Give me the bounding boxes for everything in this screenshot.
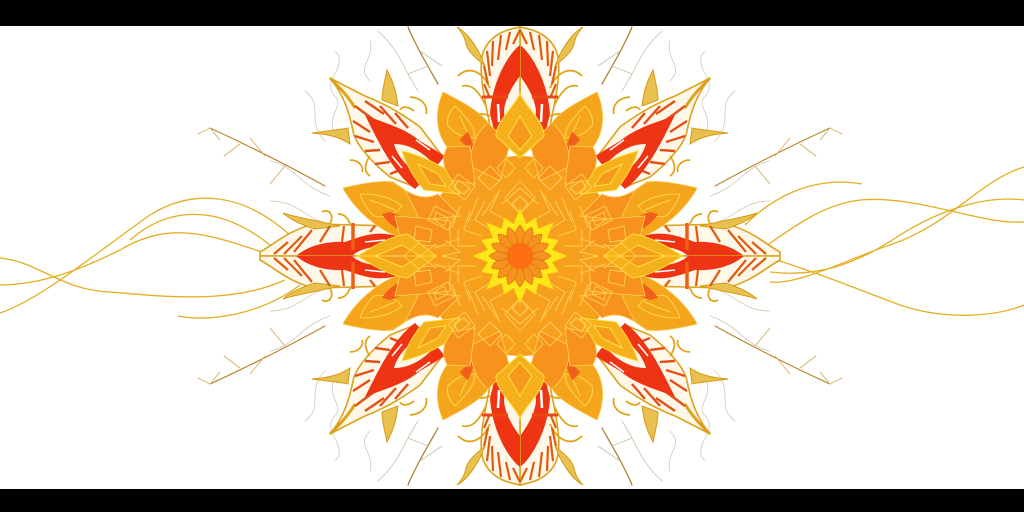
central yellow star bbox=[472, 208, 568, 304]
geometric key pattern bbox=[404, 158, 636, 354]
orange lobes bbox=[395, 123, 645, 389]
yellow inner pointed petals bbox=[357, 94, 683, 418]
central flower bbox=[489, 225, 551, 287]
gold outer petals bbox=[343, 92, 697, 420]
center disc bbox=[507, 243, 533, 269]
flowing gold lines: right bbox=[745, 167, 1024, 315]
orange inner disc bbox=[420, 156, 620, 356]
bottom black bar bbox=[0, 489, 1024, 512]
thin filaments bbox=[198, 27, 842, 485]
flowing gold lines: left bbox=[0, 198, 300, 318]
top black bar bbox=[0, 0, 1024, 26]
red lace motifs bbox=[260, 27, 780, 485]
